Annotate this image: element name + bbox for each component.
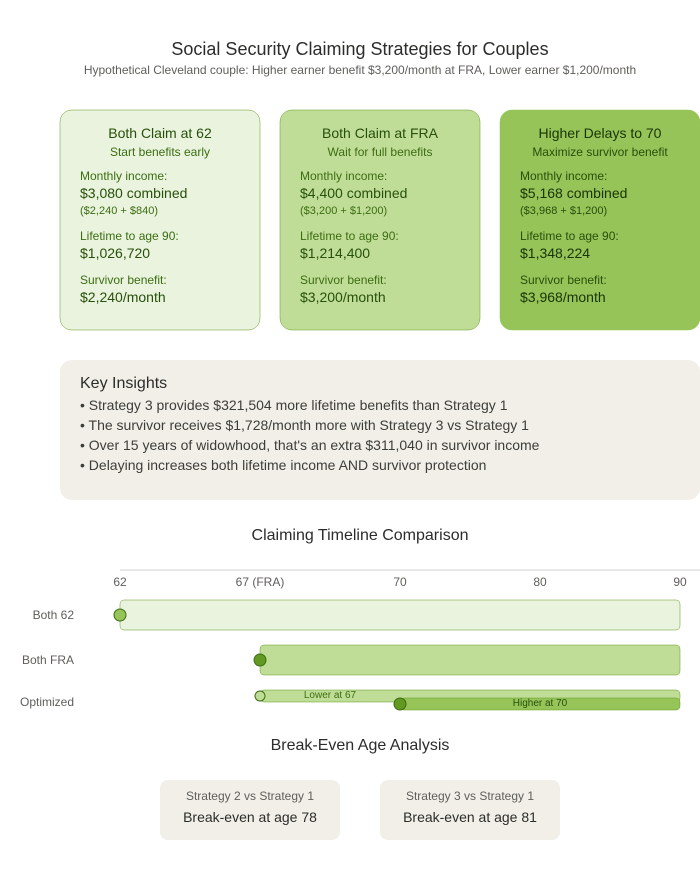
row: optimized: Higher at 70 [513, 698, 567, 709]
survivor benefit: Survivor benefit: [300, 273, 387, 287]
insights list: • Over 15 years of widowhood, that's an extra $311,040 in survivor income [80, 437, 539, 453]
row: both 62: Both 62 [33, 608, 74, 622]
survivor benefit: $2,240/month [80, 289, 166, 305]
survivor benefit: $3,200/month [300, 289, 386, 305]
lifetime total: Lifetime to age 90: [520, 229, 619, 243]
monthly income: $4,400 combined [300, 185, 407, 201]
survivor benefit: Survivor benefit: [520, 273, 607, 287]
monthly income [520, 169, 627, 217]
panel: strategy 2 break-even [160, 780, 340, 840]
monthly income [80, 169, 187, 217]
row: both 62 [33, 600, 680, 630]
monthly income [300, 169, 407, 217]
break-even heading: Break-Even Age Analysis [271, 737, 449, 754]
timeline chart [20, 569, 700, 710]
card heading: Both Claim at FRA [322, 125, 438, 141]
age axis labels [113, 575, 687, 589]
insights list: • Delaying increases both lifetime income AND survivor protection [80, 457, 486, 473]
age axis labels: 80 [533, 575, 547, 589]
lifetime total [520, 229, 619, 261]
lifetime total: $1,214,400 [300, 245, 370, 261]
survivor benefit [520, 273, 607, 305]
card subheading: Wait for full benefits [328, 145, 432, 159]
monthly income: ($3,200 + $1,200) [300, 205, 387, 217]
age axis labels: 62 [113, 575, 127, 589]
panel: both claim at FRA [280, 110, 480, 330]
monthly income: ($2,240 + $840) [80, 205, 158, 217]
card heading: Higher Delays to 70 [539, 125, 661, 141]
survivor benefit: Survivor benefit: [80, 273, 167, 287]
panel: both claim at 62 [60, 110, 260, 330]
row: optimized: Lower at 67 [304, 690, 356, 701]
survivor benefit [300, 273, 387, 305]
panel: strategy 2 break-even: Strategy 2 vs Strategy 1 [186, 789, 314, 803]
insights heading: Key Insights [80, 375, 167, 392]
row: optimized: Optimized [20, 695, 74, 709]
lifetime total: $1,026,720 [80, 245, 150, 261]
card heading: Both Claim at 62 [108, 125, 212, 141]
lifetime total: Lifetime to age 90: [300, 229, 399, 243]
monthly income: Monthly income: [80, 169, 167, 183]
insights list: • The survivor receives $1,728/month more with Strategy 3 vs Strategy 1 [80, 417, 529, 433]
row: both FRA: Both FRA [22, 653, 74, 667]
insights list: • Strategy 3 provides $321,504 more lifetime benefits than Strategy 1 [80, 397, 507, 413]
title: Social Security Claiming Strategies for Couples [171, 39, 549, 59]
row: optimized [20, 690, 680, 710]
card subheading: Start benefits early [110, 145, 210, 159]
age axis labels: 67 (FRA) [236, 575, 284, 589]
age axis labels: 90 [673, 575, 687, 589]
panel: higher delays to 70 [500, 110, 700, 330]
monthly income: $5,168 combined [520, 185, 627, 201]
lifetime total: $1,348,224 [520, 245, 590, 261]
panel: key insights [60, 360, 700, 500]
survivor benefit [80, 273, 167, 305]
survivor benefit: $3,968/month [520, 289, 606, 305]
panel: strategy 2 break-even: Break-even at age 78 [183, 809, 317, 825]
monthly income: ($3,968 + $1,200) [520, 205, 607, 217]
lifetime total: Lifetime to age 90: [80, 229, 179, 243]
monthly income: Monthly income: [300, 169, 387, 183]
card subheading: Maximize survivor benefit [532, 145, 668, 159]
timeline heading: Claiming Timeline Comparison [252, 527, 468, 544]
monthly income: $3,080 combined [80, 185, 187, 201]
insights list [80, 397, 539, 473]
lifetime total [300, 229, 399, 261]
age axis labels: 70 [393, 575, 407, 589]
subtitle: Hypothetical Cleveland couple: Higher earner benefit $3,200/month at FRA, Lower earner $1,200/month [84, 63, 636, 77]
monthly income: Monthly income: [520, 169, 607, 183]
lifetime total [80, 229, 179, 261]
panel: strategy 3 break-even: Break-even at age 81 [403, 809, 537, 825]
panel: strategy 3 break-even: Strategy 3 vs Strategy 1 [406, 789, 534, 803]
row: both FRA [22, 644, 680, 676]
panel: strategy 3 break-even [380, 780, 560, 840]
